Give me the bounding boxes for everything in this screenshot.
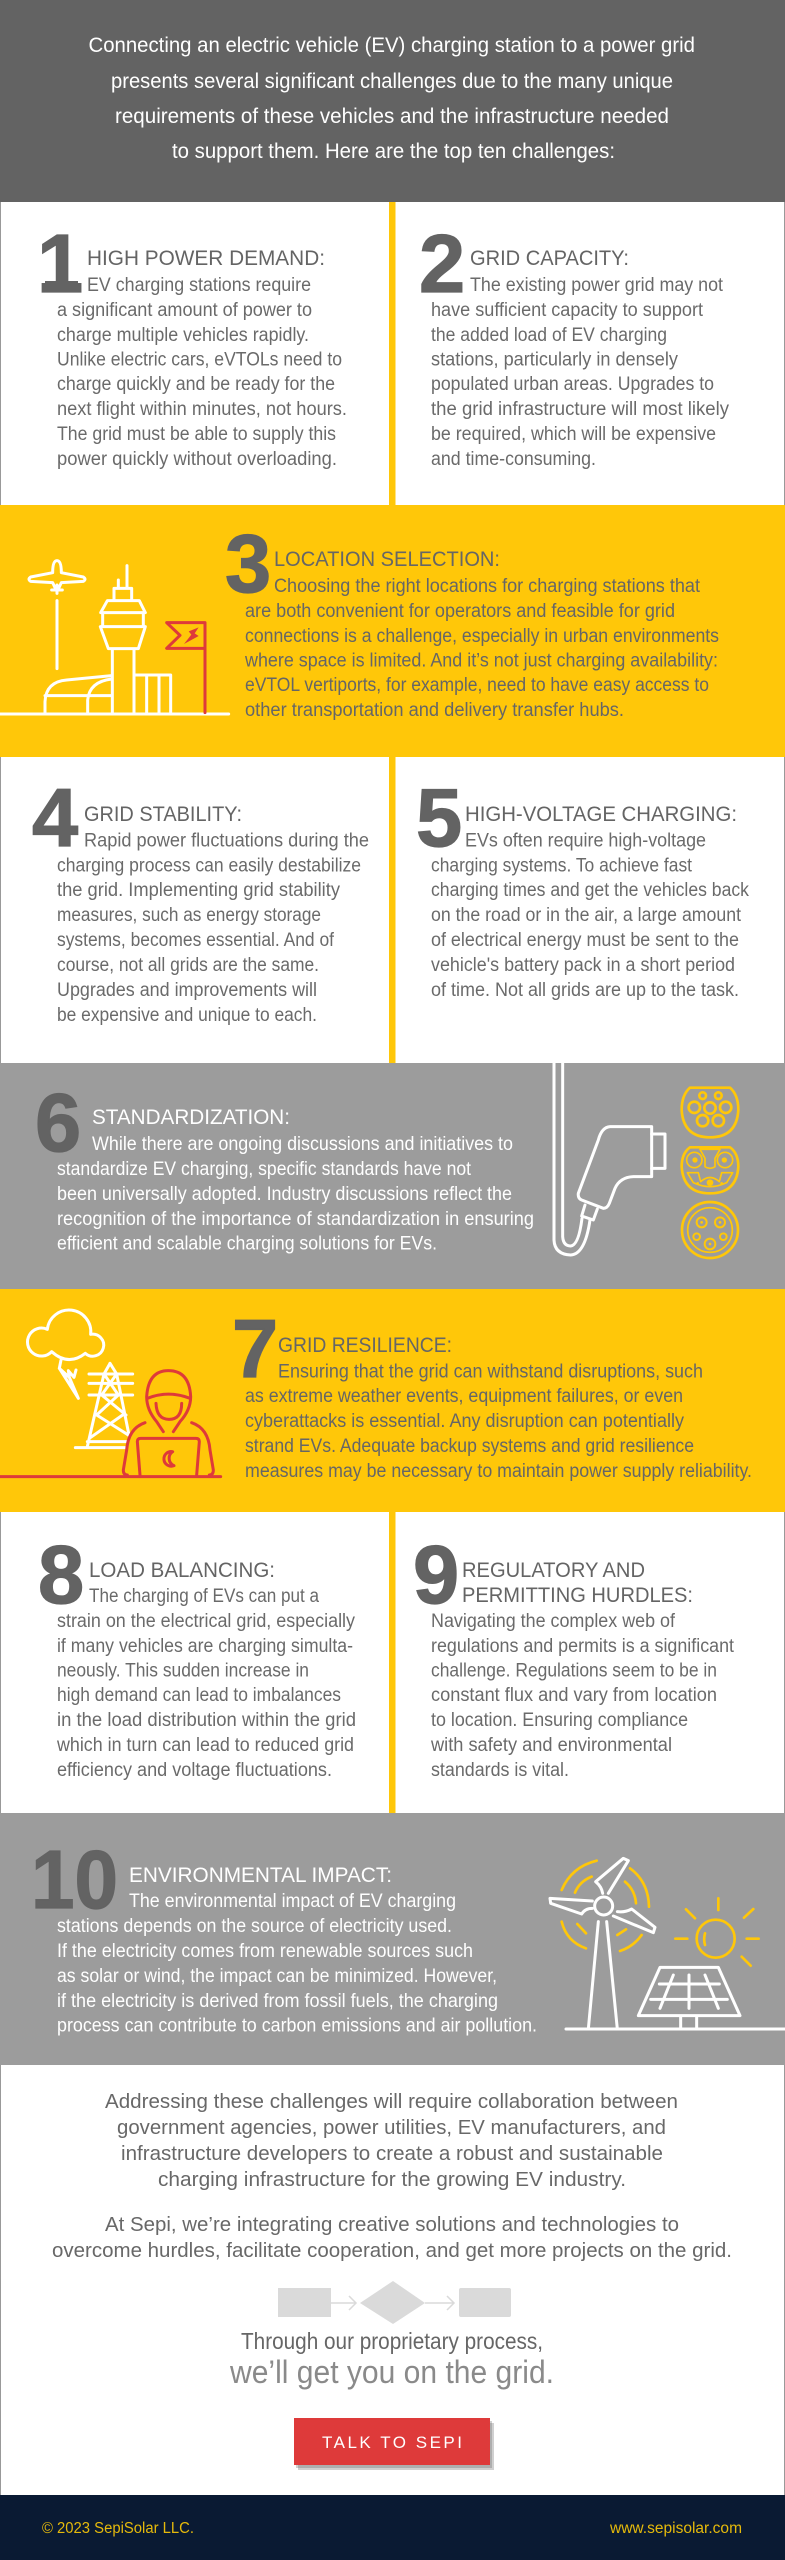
body: high-voltage charging: [431, 830, 749, 1001]
body: grid resilience: strand EVs. Adequate backup systems and grid resilience: [245, 1436, 694, 1457]
tagline: we’ll get you on the grid.: [229, 2354, 554, 2390]
body: high power demand: The grid must be able to supply this: [57, 424, 336, 445]
body: grid stability: measures, such as energy storage: [57, 905, 321, 926]
body: high power demand: charge multiple vehicles rapidly.: [57, 325, 309, 346]
heading: environmental impact: ENVIRONMENTAL IMPACT:: [129, 1863, 392, 1887]
closing paragraph 1: Addressing these challenges will require collaboration between: [105, 2090, 678, 2113]
body: grid stability: charging process can easily destabilize: [57, 856, 361, 876]
body: regulatory and permitting hurdles: standards is vital.: [431, 1760, 569, 1781]
body: high-voltage charging: of electrical energy must be sent to the: [431, 930, 739, 951]
body: grid capacity: be required, which will be expensive: [431, 424, 716, 445]
body: grid resilience: as extreme weather events, equipment failures, or even: [245, 1386, 683, 1407]
icon: storm, pylon and hacker: [0, 1310, 221, 1477]
intro text: [88, 33, 695, 163]
icon: charging plug and connector types: [554, 1063, 738, 1258]
body: grid capacity: the grid infrastructure will most likely: [431, 399, 729, 420]
body: high power demand: a significant amount of power to: [57, 300, 312, 321]
body: grid stability: systems, becomes essential. And of: [57, 930, 335, 951]
heading: high power demand: HIGH POWER DEMAND:: [87, 246, 325, 270]
intro text: requirements of these vehicles and the infrastructure needed: [115, 104, 669, 128]
body: environmental impact: process can contribute to carbon emissions and air pollution.: [57, 2016, 537, 2036]
body: grid capacity: populated urban areas. Upgrades to: [431, 374, 714, 395]
body: location selection: eVTOL vertiports, for example, need to have easy access to: [245, 675, 709, 696]
icon: process flow diagram: [278, 2281, 511, 2324]
body: grid stability: course, not all grids are the same.: [57, 955, 319, 976]
body: environmental impact: The environmental impact of EV charging: [129, 1891, 456, 1912]
heading: grid capacity: GRID CAPACITY:: [470, 246, 629, 270]
heading: high-voltage charging: HIGH-VOLTAGE CHARGING:: [465, 802, 737, 826]
footer: [0, 2495, 785, 2560]
panel: 3 location selection: [0, 505, 785, 757]
body: environmental impact: if the electricity is derived from fossil fuels, the charging: [57, 1991, 498, 2012]
body: high-voltage charging: charging systems. To achieve fast: [431, 856, 693, 876]
number 4: 4: [32, 771, 78, 864]
panel: 9 regulatory and permitting hurdles: [396, 1512, 784, 1813]
heading: load balancing: LOAD BALANCING:: [89, 1558, 275, 1582]
icon: airport tower, plane and charging flag: [0, 561, 229, 714]
heading: standardization: STANDARDIZATION:: [92, 1105, 290, 1129]
body: location selection: where space is limited. And it’s not just charging availability:: [244, 650, 718, 672]
panel: 10 environmental impact: [0, 1813, 785, 2065]
body: high-voltage charging: EVs often require high-voltage: [465, 830, 706, 852]
body: high power demand: next flight within minutes, not hours.: [57, 399, 347, 420]
closing paragraph 1: charging infrastructure for the growing EV industry.: [158, 2168, 626, 2191]
panel: conclusion: [1, 2065, 784, 2495]
number 1: 1: [37, 217, 83, 310]
button: talk to Sepi: TALK TO SEPI: [322, 2433, 462, 2452]
body: load balancing: high demand can lead to imbalances: [57, 1685, 341, 1706]
body: environmental impact: [57, 1891, 537, 2036]
body: load balancing: strain on the electrical grid, especially: [57, 1611, 355, 1632]
heading: grid resilience: GRID RESILIENCE:: [278, 1333, 452, 1357]
body: grid stability: be expensive and unique to each.: [57, 1005, 317, 1026]
body: grid resilience: Ensuring that the grid can withstand disruptions, such: [278, 1362, 703, 1382]
closing paragraph 1: infrastructure developers to create a robust and sustainable: [121, 2142, 663, 2165]
body: location selection: connections is a challenge, especially in urban environments: [245, 626, 719, 647]
body: high-voltage charging: of time. Not all grids are up to the task.: [431, 980, 739, 1001]
panel: 2 grid capacity: [396, 202, 784, 505]
body: grid capacity: The existing power grid may not: [470, 275, 724, 296]
body: load balancing: if many vehicles are charging simulta-: [57, 1636, 353, 1657]
closing paragraph 1: [105, 2090, 678, 2191]
body: high power demand: power quickly without overloading.: [57, 449, 337, 470]
body: environmental impact: If the electricity comes from renewable sources such: [57, 1941, 473, 1962]
body: high power demand: Unlike electric cars, eVTOLs need to: [57, 350, 342, 370]
intro text: presents several significant challenges due to the many unique: [111, 69, 673, 93]
body: regulatory and permitting hurdles: regulations and permits is a significant: [431, 1636, 735, 1657]
body: grid capacity: [431, 275, 729, 470]
number 5: 5: [416, 771, 462, 864]
intro text: to support them. Here are the top ten challenges:: [172, 139, 615, 163]
number 9: 9: [413, 1528, 459, 1621]
body: load balancing: efficiency and voltage fluctuations.: [57, 1760, 332, 1781]
number 10: 10: [31, 1833, 118, 1926]
body: regulatory and permitting hurdles: Navigating the complex web of: [431, 1611, 676, 1632]
body: grid capacity: stations, particularly in densely: [431, 350, 678, 370]
body: location selection: Choosing the right locations for charging stations that: [274, 576, 701, 597]
copyright: © 2023 SepiSolar LLC.: [42, 2520, 194, 2537]
panel: 1 high power demand: [1, 202, 389, 505]
body: high power demand: EV charging stations require: [87, 275, 311, 296]
intro text: Connecting an electric vehicle (EV) charging station to a power grid: [88, 33, 695, 57]
body: load balancing: The charging of EVs can put a: [89, 1586, 319, 1607]
body: load balancing: in the load distribution within the grid: [57, 1710, 356, 1731]
tagline: [229, 2328, 554, 2390]
body: environmental impact: as solar or wind, the impact can be minimized. However,: [57, 1966, 497, 1987]
panel: 7 grid resilience: [0, 1289, 785, 1512]
body: regulatory and permitting hurdles: challenge. Regulations seem to be in: [431, 1660, 717, 1682]
body: grid capacity: the added load of EV charging: [431, 325, 667, 346]
body: standardization: efficient and scalable charging solutions for EVs.: [57, 1234, 437, 1254]
body: regulatory and permitting hurdles: to location. Ensuring compliance: [431, 1710, 688, 1731]
closing paragraph 1: government agencies, power utilities, EV manufacturers, and: [117, 2116, 666, 2139]
panel: 6 standardization: [0, 1063, 785, 1289]
body: grid resilience: [245, 1362, 752, 1482]
heading: regulatory and permitting hurdles: [462, 1558, 693, 1607]
body: grid stability: Rapid power fluctuations during the: [84, 830, 369, 852]
body: high-voltage charging: on the road or in the air, a large amount: [431, 905, 742, 926]
closing paragraph 2: overcome hurdles, facilitate cooperation, and get more projects on the grid.: [52, 2239, 732, 2262]
closing paragraph 2: [52, 2213, 732, 2262]
panel: intro header: [0, 0, 785, 202]
body: environmental impact: stations depends on the source of electricity used.: [57, 1916, 452, 1937]
website: www.sepisolar.com: [609, 2520, 742, 2537]
heading: location selection: LOCATION SELECTION:: [274, 547, 500, 571]
body: standardization: [57, 1134, 534, 1254]
heading: grid stability: GRID STABILITY:: [84, 802, 242, 826]
number 3: 3: [225, 517, 271, 610]
body: standardization: been universally adopted. Industry discussions reflect the: [57, 1184, 512, 1205]
body: location selection: are both convenient for operators and feasible for grid: [245, 601, 675, 622]
body: location selection: other transportation and delivery transfer hubs.: [245, 700, 624, 721]
heading: regulatory and permitting hurdles: REGULATORY AND: [462, 1558, 645, 1582]
body: grid stability: Upgrades and improvements will: [57, 980, 317, 1001]
icon: wind turbine, sun and solar panel: [550, 1858, 785, 2029]
panel: 5 high-voltage charging: [396, 757, 784, 1063]
body: regulatory and permitting hurdles: with safety and environmental: [430, 1735, 672, 1756]
body: grid resilience: measures may be necessary to maintain power supply reliability.: [245, 1461, 752, 1482]
body: standardization: While there are ongoing discussions and initiatives to: [92, 1134, 513, 1155]
number 8: 8: [38, 1528, 84, 1621]
panel: 4 grid stability: [1, 757, 389, 1063]
body: grid capacity: have sufficient capacity to support: [431, 300, 704, 321]
heading: regulatory and permitting hurdles: PERMITTING HURDLES:: [462, 1583, 693, 1607]
closing paragraph 2: At Sepi, we’re integrating creative solutions and technologies to: [105, 2213, 679, 2236]
body: high power demand: [57, 275, 347, 470]
button: talk to Sepi: [294, 2418, 494, 2470]
body: load balancing: [56, 1586, 356, 1781]
body: grid capacity: and time-consuming.: [431, 449, 596, 470]
body: regulatory and permitting hurdles: [430, 1611, 735, 1781]
body: load balancing: which in turn can lead to reduced grid: [56, 1735, 354, 1756]
panel: 8 load balancing: [1, 1512, 389, 1813]
tagline: Through our proprietary process,: [241, 2328, 543, 2354]
body: grid resilience: cyberattacks is essential. Any disruption can potentially: [245, 1411, 684, 1432]
body: location selection: [244, 576, 719, 721]
body: load balancing: neously. This sudden increase in: [57, 1660, 309, 1682]
body: high-voltage charging: charging times and get the vehicles back: [431, 880, 749, 901]
body: grid stability: [57, 830, 369, 1026]
body: regulatory and permitting hurdles: constant flux and vary from location: [431, 1685, 717, 1706]
body: standardization: recognition of the importance of standardization in ensuring: [57, 1209, 534, 1230]
number 2: 2: [419, 217, 465, 310]
body: high-voltage charging: vehicle's battery pack in a short period: [431, 955, 735, 976]
body: high power demand: charge quickly and be ready for the: [57, 374, 335, 395]
body: grid stability: the grid. Implementing grid stability: [57, 880, 340, 901]
number 7: 7: [232, 1302, 278, 1395]
body: standardization: standardize EV charging, specific standards have not: [57, 1159, 472, 1180]
number 6: 6: [35, 1076, 81, 1169]
